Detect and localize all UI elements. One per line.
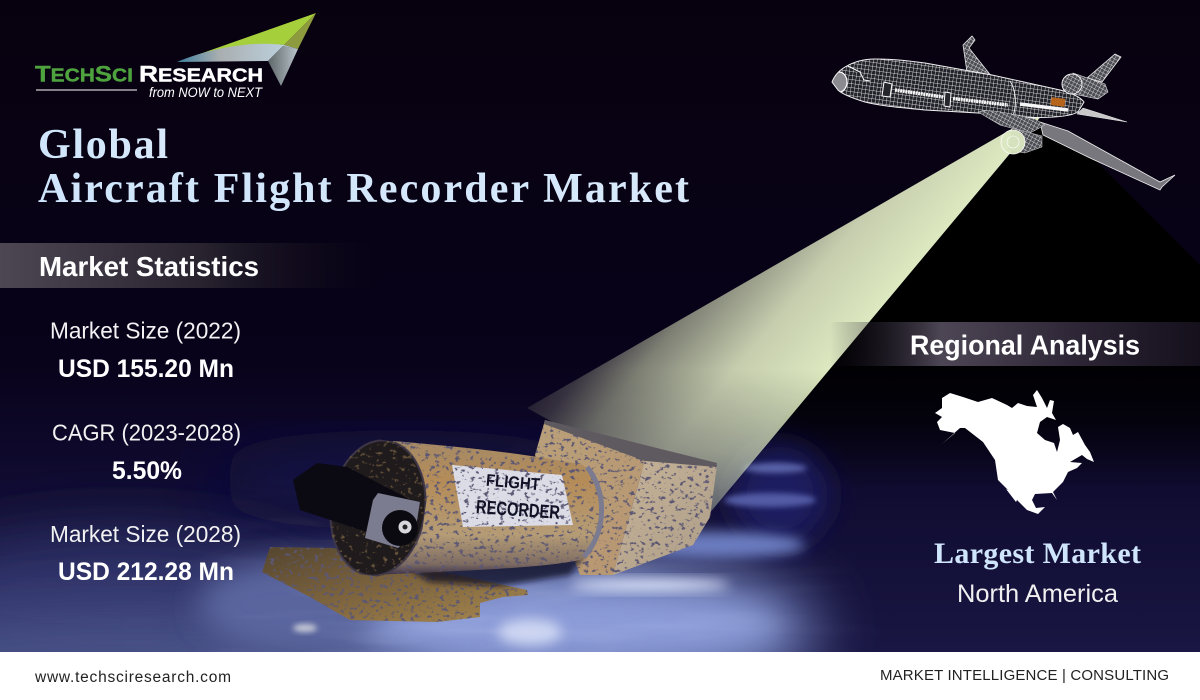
flight recorder illustration <box>262 420 717 622</box>
stat: market size 2022 <box>50 318 241 383</box>
vertical stabilizer <box>1087 54 1121 82</box>
orange recorder marker <box>1051 97 1065 107</box>
title: Aircraft Flight Recorder Market <box>38 166 689 212</box>
stat: market size 2022: USD 155.20 Mn <box>58 355 234 383</box>
wing root fairing <box>978 111 1045 133</box>
strapline: MARKET INTELLIGENCE | CONSULTING <box>880 667 1169 684</box>
light beam from aircraft <box>527 108 1048 515</box>
mounting plate <box>262 547 528 622</box>
market statistics heading: Market Statistics <box>39 251 259 282</box>
stat: CAGR: 5.50% <box>112 457 182 485</box>
stat: CAGR: CAGR (2023-2028) <box>52 420 241 446</box>
fuselage <box>832 60 1084 117</box>
website: www.techsciresearch.com <box>34 669 231 686</box>
underwing engine <box>1008 128 1042 153</box>
largest market label: Largest Market <box>934 537 1141 570</box>
logo arrow mark <box>177 13 316 86</box>
logo tagline: from NOW to NEXT <box>149 84 263 100</box>
logo wordmark second word: RESEARCH <box>139 62 263 86</box>
background scene <box>0 120 1200 652</box>
recorder label: FLIGHT <box>485 471 541 494</box>
title: Global <box>38 122 168 168</box>
title <box>38 122 689 212</box>
rear box <box>535 420 717 575</box>
panel: regional analysis <box>830 322 1200 608</box>
cylinder end cap <box>322 434 434 582</box>
beacon end <box>382 510 418 546</box>
stat: market size 2028: USD 212.28 Mn <box>58 558 234 586</box>
largest market value: North America <box>957 580 1118 608</box>
stat: market size 2022: Market Size (2022) <box>50 318 241 344</box>
panel: market statistics <box>0 243 395 586</box>
near wing <box>1040 122 1175 190</box>
shadow under cylinder <box>410 555 585 586</box>
market statistics header band <box>0 243 395 288</box>
recorder label <box>452 465 573 527</box>
far wing <box>963 36 992 77</box>
beacon shaft <box>293 463 417 533</box>
horizontal stabilizer <box>1077 108 1127 122</box>
regional analysis header band <box>830 322 1200 366</box>
aircraft wireframe illustration <box>825 36 1175 190</box>
cylinder body <box>373 441 604 575</box>
logo <box>35 13 316 100</box>
regional analysis heading: Regional Analysis <box>910 330 1140 360</box>
map: north america <box>935 390 1094 514</box>
cylinder end band <box>584 467 602 557</box>
stat: market size 2028: Market Size (2028) <box>50 521 241 547</box>
recorder label: RECORDER <box>475 497 561 524</box>
beacon bracket <box>365 493 420 548</box>
tail engine <box>1069 73 1108 99</box>
logo wordmark: TECH SCI <box>35 62 133 86</box>
stat: CAGR <box>52 420 241 485</box>
stat: market size 2028 <box>50 521 241 586</box>
footer <box>0 652 1200 700</box>
logo rule <box>36 90 137 91</box>
